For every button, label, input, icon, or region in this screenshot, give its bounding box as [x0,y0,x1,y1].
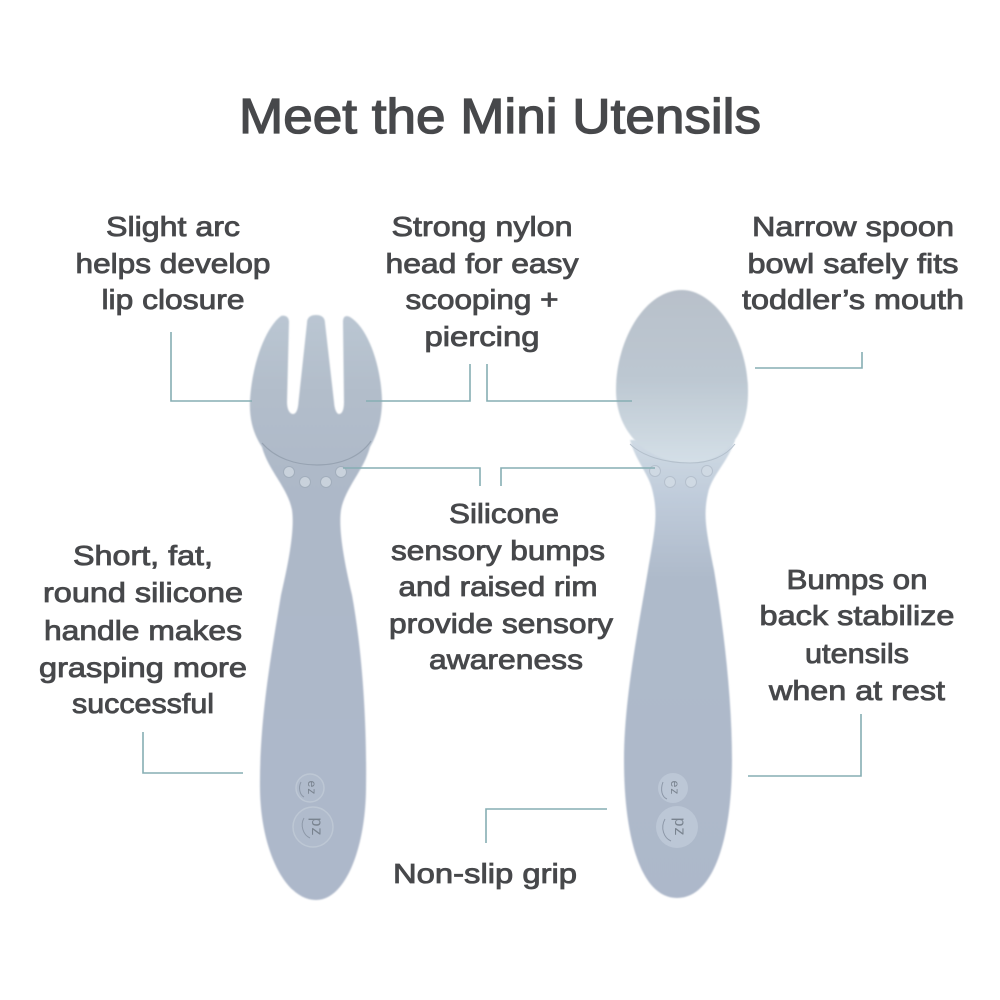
callout: nylon head: piercing [424,321,540,352]
logo marks: ez [305,781,319,795]
callout: narrow spoon bowl: Narrow spoon [752,211,954,242]
callout: nylon head: Strong nylon [392,211,572,242]
title: Meet the Mini Utensils [239,90,761,144]
callout: bumps on back: back stabilize [760,600,954,631]
spoon bowl [616,290,748,463]
logo marks [293,774,333,847]
callout: nylon head [386,211,578,352]
callout: slight arc: lip closure [102,284,244,315]
callout: non-slip grip: Non-slip grip [393,858,577,889]
callout: sensory bumps: sensory bumps [391,535,605,566]
spoon sensory bumps [650,466,712,488]
callout: handle: grasping more [39,652,247,683]
callout: handle: round silicone [43,577,243,608]
fork body [250,315,382,900]
callout lines [143,332,862,843]
callout: narrow spoon bowl: bowl safely fits [748,248,958,279]
callout: bumps on back [760,564,954,706]
callout: slight arc: helps develop [76,248,270,279]
spoon logo marks: pz [671,818,688,836]
callout: handle: successful [72,688,214,719]
fork head rim [262,441,371,465]
callout: sensory bumps: provide sensory [389,608,613,639]
callout: narrow spoon bowl: toddler’s mouth [742,284,964,315]
callout: slight arc: Slight arc [106,211,240,242]
spoon illustration [616,290,748,898]
callout: handle: handle makes [44,615,242,646]
callout: nylon head: scooping + [406,284,558,315]
callout: sensory bumps [389,498,613,675]
callout: bumps on back: when at rest [768,675,945,706]
callout: sensory bumps: Silicone [449,498,559,529]
callout: bumps on back: Bumps on [786,564,928,595]
spoon logo marks: ez [668,781,682,795]
bowl rim [630,444,735,463]
fork illustration [250,315,382,900]
callout: sensory bumps: awareness [429,644,583,675]
callout: sensory bumps: and raised rim [398,571,598,602]
spoon logo marks [656,773,698,848]
callout: handle: Short, fat, [73,540,213,571]
callout: nylon head: head for easy [386,248,578,279]
callout: bumps on back: utensils [805,638,909,669]
logo marks: pz [308,818,325,836]
callout: narrow spoon bowl [742,211,964,315]
callout: slight arc [76,211,270,315]
callout: handle [39,540,247,719]
spoon handle [624,440,735,898]
sensory bumps [284,466,346,488]
